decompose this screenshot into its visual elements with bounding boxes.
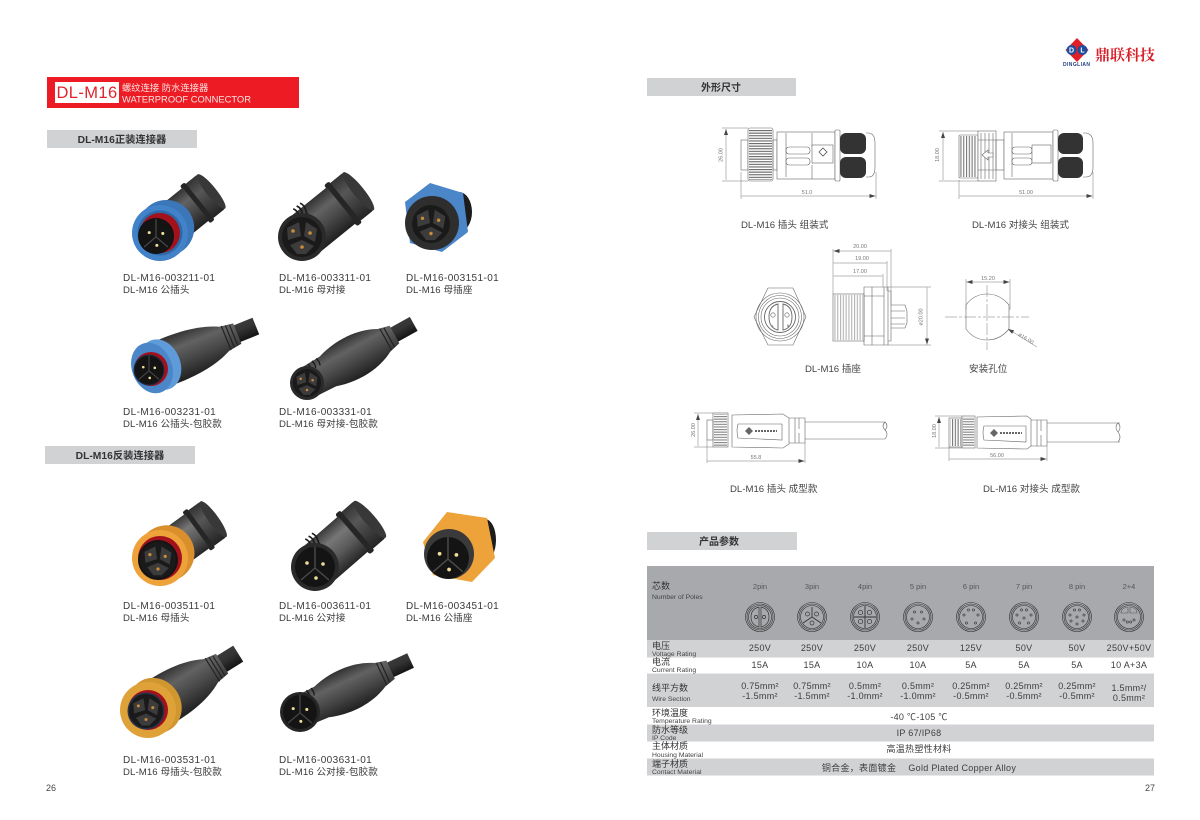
table row: temperature: 环境温度 [652,707,688,718]
product: DL-M16-003311-01 [278,166,379,296]
title banner [47,77,299,108]
table row: voltage: 电压 [652,640,670,651]
table row: current: Current Rating [652,667,696,674]
drawing: socket front and side [754,244,931,375]
product: DL-M16-003151-01 [405,183,499,296]
drawing: socket front and side: N [787,324,790,328]
product: DL-M16-003151-01: DL-M16-003151-01 [406,273,499,284]
table row: wire section: 1.5mm²/ [1111,683,1147,693]
logo: D [1069,48,1074,54]
product: DL-M16-003211-01: DL-M16-003211-01 [123,273,215,284]
drawing: plug molded: 55.8 [751,455,761,461]
table row: contact material: 端子材质 [652,758,688,769]
table row: IP code: IP 67/IP68 [897,728,941,738]
drawing: plug molded [691,413,887,495]
table row: wire section: 线平方数 [652,682,688,693]
table row: number of poles: 2pin [753,582,767,591]
table row: number of poles: 4pin [858,582,872,591]
drawing: coupler assembled: DL-M16 对接头 组装式 [972,219,1069,231]
drawing: plug assembled [718,128,876,231]
drawing: plug assembled: DL-M16 插头 组装式 [741,219,829,231]
pin icon: 7 pin [1010,602,1038,632]
table row: wire section: 0.25mm² [952,681,990,691]
table row: contact material [647,758,1154,776]
table row: wire section: -0.5mm² [1059,691,1095,701]
pin icon: 4 pin [850,602,880,632]
product: DL-M16-003331-01: DL-M16 母对接-包胶款 [279,418,378,430]
drawing: socket front and side: L [772,324,774,328]
product: DL-M16-003311-01: DL-M16-003311-01 [279,273,371,284]
pin icon: 6 pin [956,602,986,632]
table row: current: 10 A+3A [1111,660,1147,670]
title banner: DL-M16 [56,84,118,102]
page number 27: 27 [1145,783,1155,793]
drawing: coupler molded [932,416,1120,495]
table row: wire section: -1.5mm² [794,691,830,701]
heading: reverse connectors: DL-M16反装连接器 [76,449,165,462]
pin icon: 8 pin [1062,602,1092,632]
table row: temperature: Temperature Rating [652,718,712,725]
drawing: mounting hole: 15.20 [981,276,995,282]
table row: number of poles: 3pin [805,582,819,591]
logo: L [1080,48,1085,54]
product: DL-M16-003631-01 [279,641,420,778]
table row: wire section: -1.0mm² [900,691,936,701]
product: DL-M16-003331-01 [279,305,424,430]
product: DL-M16-003451-01: DL-M16 公插座 [406,612,473,624]
table row: contact material: 铜合金，表面镀金 Gold Plated Copper Alloy [822,762,1016,773]
table row: wire section: 0.25mm² [1005,681,1043,691]
logo: DINGLIAN [1063,62,1090,68]
table row: housing material: 高温热塑性材料 [886,743,952,754]
table row: current: 15A [752,660,768,670]
heading: product parameters: 产品参数 [699,535,739,548]
table row: voltage: Voltage Rating [652,651,696,658]
heading: forward connectors: DL-M16正装连接器 [78,133,167,146]
table row: number of poles: 芯数 [652,580,670,591]
heading: forward connectors [47,130,197,148]
drawing: plug molded: 26.00 [691,423,697,437]
table row: voltage: 250V [749,643,771,653]
table row: number of poles: 2+4 [1123,582,1135,591]
table row: voltage: 250V+50V [1107,643,1151,653]
drawing: plug molded: DL-M16 插头 成型款 [730,483,818,495]
product: DL-M16-003511-01 [123,494,234,624]
product: DL-M16-003531-01: DL-M16 母插头-包胶款 [123,766,222,778]
table row: number of poles: 7 pin [1016,582,1032,591]
table row: wire section: 0.75mm² [793,681,831,691]
table row: voltage: 250V [907,643,929,653]
table row: wire section: -0.5mm² [1006,691,1042,701]
product: DL-M16-003331-01: DL-M16-003331-01 [279,407,372,418]
pin icon: 2+4 [1114,602,1144,632]
pin icon: 3 pin [798,602,826,632]
product: DL-M16-003531-01: DL-M16-003531-01 [123,755,216,766]
table row: wire section: 0.5mm² [849,681,881,691]
product: DL-M16-003151-01: DL-M16 母插座 [406,284,473,296]
table row: wire section: 0.5mm² [902,681,934,691]
table row: temperature: -40 ℃-105 ℃ [890,712,948,722]
table row: current: 5A [965,660,977,670]
table row: wire section: -0.5mm² [953,691,989,701]
heading: reverse connectors [45,446,195,464]
table row: number of poles: Number of Poles [652,594,703,601]
table row: temperature [652,707,948,725]
drawing: plug assembled: 26.00 [718,148,724,162]
table row: contact material: Contact Material [652,769,702,776]
table row: current: 电流 [652,656,670,667]
product: DL-M16-003311-01: DL-M16 母对接 [279,284,346,296]
product: DL-M16-003511-01: DL-M16 母插头 [123,612,190,624]
product: DL-M16-003511-01: DL-M16-003511-01 [123,601,215,612]
drawing: coupler molded: 56.00 [990,453,1004,459]
heading: product parameters [647,532,797,550]
table row: number of poles [647,566,1154,640]
product: DL-M16-003631-01: DL-M16 公对接-包胶款 [279,766,378,778]
table row: voltage: 50V [1016,643,1032,653]
drawing: mounting hole [945,276,1037,375]
product: DL-M16-003611-01 [279,495,391,624]
heading: dimensions [647,78,796,96]
logo: 鼎联科技 [1095,44,1155,65]
drawing: coupler assembled [935,130,1093,231]
product: DL-M16-003631-01: DL-M16-003631-01 [279,755,372,766]
pin icon: 2 pin [746,602,774,632]
product: DL-M16-003231-01 [123,302,266,430]
title banner: 螺纹连接 防水连接器 [122,82,209,93]
product: DL-M16-003611-01: DL-M16 公对接 [279,612,346,624]
heading: dimensions: 外形尺寸 [701,81,741,94]
table row: current: 10A [910,660,926,670]
product: DL-M16-003231-01: DL-M16 公插头-包胶款 [123,418,222,430]
table row: housing material: 主体材质 [652,740,688,751]
drawing: coupler molded: DL-M16 对接头 成型款 [983,483,1080,495]
drawing: socket front and side: ø20.00 [918,308,924,326]
table row: wire section: -1.0mm² [847,691,883,701]
table row: IP code: 防水等级 [652,724,688,735]
product: DL-M16-003611-01: DL-M16-003611-01 [279,601,371,612]
table row: housing material: Housing Material [652,752,703,759]
page number 26: 26 [46,783,56,793]
table row: number of poles: 6 pin [963,582,979,591]
table row: voltage [647,640,1154,658]
table row: current: 15A [804,660,820,670]
table row: voltage: 250V [854,643,876,653]
table row: current: 10A [857,660,873,670]
table row: number of poles: 5 pin [910,582,926,591]
title banner: WATERPROOF CONNECTOR [122,94,251,104]
table row: wire section [647,674,1154,707]
table row: wire section: Wire Section [652,696,691,703]
parameter table [647,566,1154,776]
drawing: mounting hole: ø16.00 [1017,332,1034,346]
drawing: socket front and side: DL-M16 插座 [805,363,861,375]
drawing: coupler assembled: 51.00 [1019,190,1033,196]
table row: current: 5A [1071,660,1083,670]
pin icon: 5 pin [904,602,932,632]
drawing: coupler molded: 18.00 [932,424,938,438]
drawing: plug assembled: 51.0 [802,190,812,196]
logo [1063,38,1155,68]
table row: wire section: 0.75mm² [741,681,779,691]
drawing: socket front and side: 20.00 [853,244,867,250]
table row: number of poles: 8 pin [1069,582,1085,591]
drawing: coupler assembled: 18.00 [935,148,941,162]
table row: voltage: 125V [960,643,982,653]
table row: voltage: 50V [1069,643,1085,653]
drawing: socket front and side: 17.00 [853,269,867,275]
product: DL-M16-003531-01 [118,630,253,778]
table row: wire section: 0.5mm² [1113,693,1145,703]
product: DL-M16-003451-01: DL-M16-003451-01 [406,601,499,612]
product: DL-M16-003231-01: DL-M16-003231-01 [123,407,216,418]
table row: current [652,656,1147,674]
product: DL-M16-003211-01: DL-M16 公插头 [123,284,190,296]
table row: IP code: IP Code [652,735,677,742]
drawing: mounting hole: 安装孔位 [969,363,1008,375]
table row: IP code [647,724,1154,742]
table row: voltage: 250V [801,643,823,653]
drawing: socket front and side: 19.00 [855,256,869,262]
product: DL-M16-003451-01 [406,512,499,624]
product: DL-M16-003211-01 [123,167,233,296]
table row: housing material [652,740,952,759]
table row: current: 5A [1018,660,1030,670]
table row: wire section: -1.5mm² [742,691,778,701]
table row: wire section: 0.25mm² [1058,681,1096,691]
